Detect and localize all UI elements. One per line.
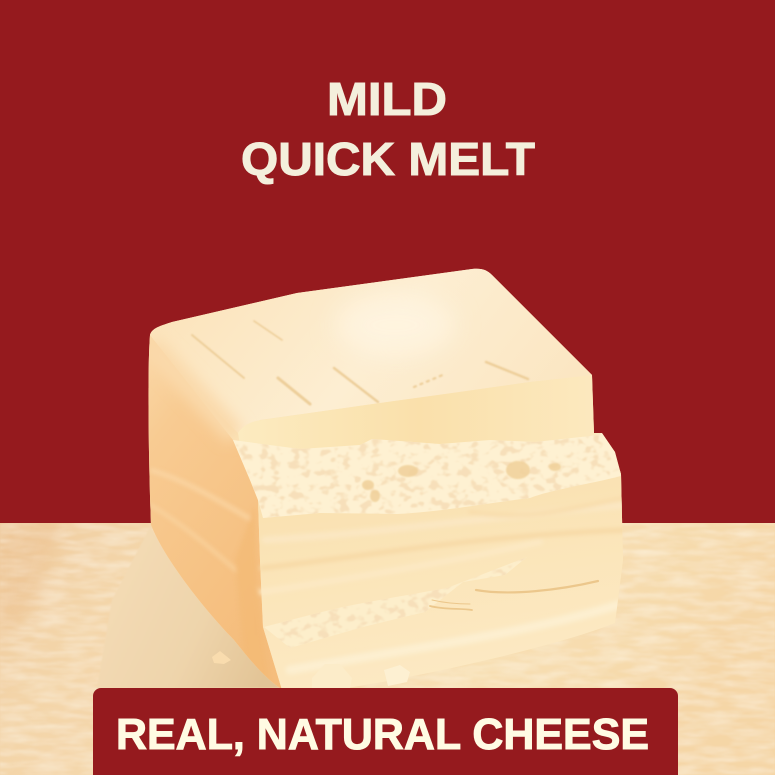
wooden cutting board: [0, 523, 775, 775]
score marks: [192, 321, 528, 404]
crumbly torn top of slab: [233, 433, 621, 518]
cheese crumbs at the base: [212, 651, 410, 688]
banner text: REAL, NATURAL CHEESE: [116, 710, 649, 759]
banner: [93, 688, 678, 775]
cut wedge surface: [238, 376, 594, 444]
heading: MILD: [327, 73, 447, 125]
smooth front slab: [258, 470, 630, 690]
soft shoulder between the top and side faces: [150, 345, 236, 436]
cheese left side face: [148, 336, 282, 688]
cheese block: [140, 260, 640, 690]
lower crumbly fissure: [264, 557, 527, 648]
board panel under cheese: [102, 533, 280, 688]
heading: [241, 73, 535, 185]
cheese top face with score marks: [140, 260, 600, 436]
cheese silhouette: [140, 260, 640, 690]
heading: QUICK MELT: [241, 133, 535, 185]
